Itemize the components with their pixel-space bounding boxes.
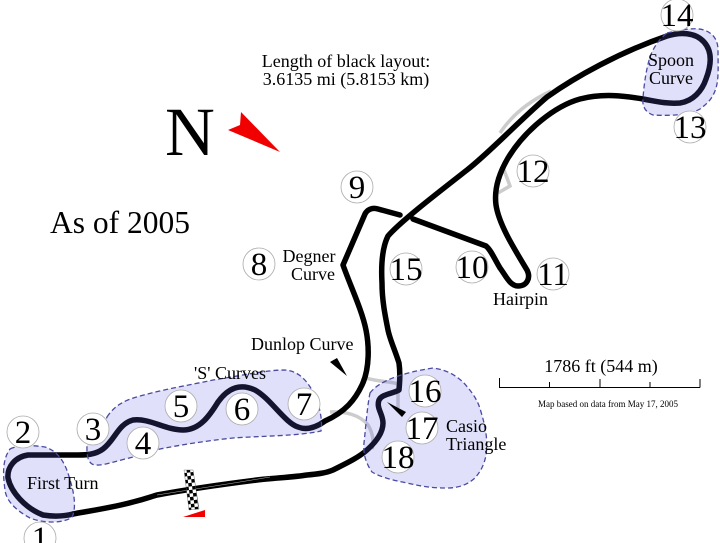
label: Hairpin: Hairpin [493, 289, 548, 309]
turn numbers: 4 [135, 426, 151, 462]
layout length note: 3.6135 mi (5.8153 km) [263, 69, 429, 90]
label: Casio Triangle: Casio [446, 416, 487, 436]
scale bar: 1786 ft (544 m) [544, 356, 658, 377]
zone: First Turn [4, 446, 74, 522]
scale bar [500, 356, 700, 388]
start marker red triangle [183, 510, 205, 517]
turn numbers: 16 [408, 374, 442, 410]
turn numbers: 11 [537, 257, 569, 293]
turn numbers: 18 [382, 440, 414, 476]
turn numbers: 8 [251, 247, 267, 283]
label: S Curves: 'S' Curves [194, 363, 266, 383]
turn numbers: 9 [349, 170, 365, 206]
zone: S Curves [87, 370, 322, 465]
label: First Turn: First Turn [27, 473, 99, 493]
zone: Casio Triangle [364, 368, 487, 488]
label: Spoon Curve: Spoon [648, 50, 694, 70]
turn numbers: 13 [674, 110, 706, 146]
pointer: Dunlop Curve [330, 358, 347, 376]
zone: Spoon Curve [643, 29, 718, 115]
turn numbers: 12 [516, 154, 550, 190]
map data note: Map based on data from May 17, 2005 [538, 399, 678, 409]
turn numbers: 15 [390, 252, 422, 288]
date note: As of 2005 [50, 205, 190, 240]
pointer: Casio Triangle [387, 402, 406, 417]
turn numbers: 10 [456, 250, 488, 286]
turn numbers: 2 [15, 415, 31, 451]
label: Spoon Curve: Curve [649, 68, 693, 88]
icon: north arrow [228, 112, 280, 152]
turn numbers: 7 [296, 387, 312, 423]
label: Casio Triangle: Triangle [446, 434, 506, 454]
north letter: N [165, 94, 215, 170]
label: Degner Curve: Curve [291, 264, 335, 284]
turn numbers: 17 [406, 411, 438, 447]
pit lane sliver [157, 477, 270, 495]
turn numbers: 5 [173, 389, 189, 425]
turn numbers: 6 [234, 392, 250, 428]
old layout sections in grey [330, 91, 551, 449]
label: Spoon Curve [648, 50, 694, 88]
label: Casio Triangle [446, 416, 506, 454]
layout length note [262, 51, 430, 90]
label: Degner Curve: Degner [283, 246, 335, 266]
turn numbers: 3 [85, 412, 101, 448]
label: Degner Curve [283, 246, 335, 284]
label: Dunlop Curve: Dunlop Curve [251, 334, 354, 354]
layout length note: Length of black layout: [262, 51, 430, 71]
start/finish checkered flag [184, 470, 199, 510]
